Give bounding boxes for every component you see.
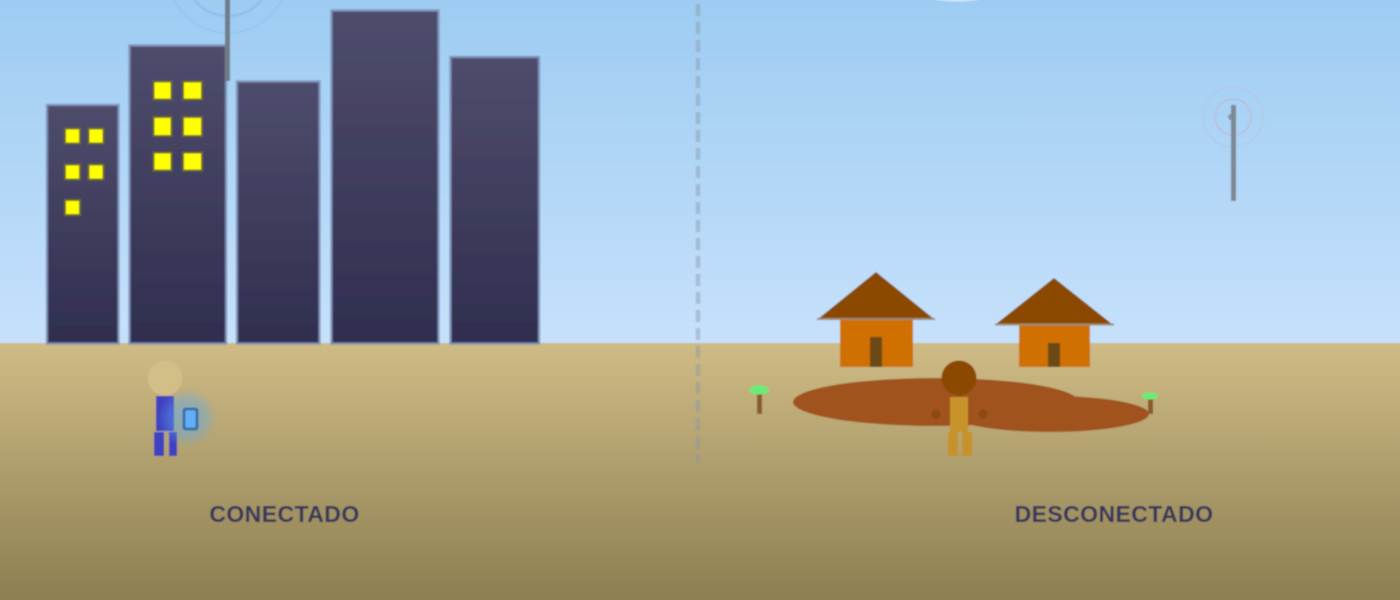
legs <box>154 432 164 456</box>
hut 1 <box>817 272 935 367</box>
ground <box>0 343 1400 600</box>
dry soil patches <box>793 378 1149 432</box>
lit windows, building 1 <box>65 128 104 215</box>
disconnected person <box>932 360 988 456</box>
building 5 <box>450 57 539 344</box>
sprout right <box>1142 392 1158 414</box>
connected antenna with signal rings <box>168 0 288 81</box>
connected city <box>47 10 539 344</box>
building 1 <box>47 105 118 344</box>
sprout left <box>749 386 769 414</box>
legs <box>948 432 958 456</box>
phone glow <box>157 388 217 448</box>
building 2 <box>130 46 226 344</box>
hut 2 <box>995 278 1114 367</box>
sky background <box>0 0 1400 343</box>
body <box>156 396 174 431</box>
lit windows, building 2 <box>154 82 202 170</box>
body <box>950 397 968 432</box>
divider <box>696 4 700 462</box>
disconnected antenna with faint rings <box>1203 87 1263 201</box>
cloud <box>921 0 993 2</box>
hands <box>932 410 940 418</box>
building 4 <box>332 10 438 344</box>
building 3 <box>237 82 320 344</box>
connected person <box>148 360 217 456</box>
label: connected: CONECTADO <box>209 501 360 527</box>
label: disconnected: DESCONECTADO <box>1015 501 1213 527</box>
head <box>942 360 976 396</box>
phone <box>184 409 197 429</box>
head <box>148 360 182 396</box>
